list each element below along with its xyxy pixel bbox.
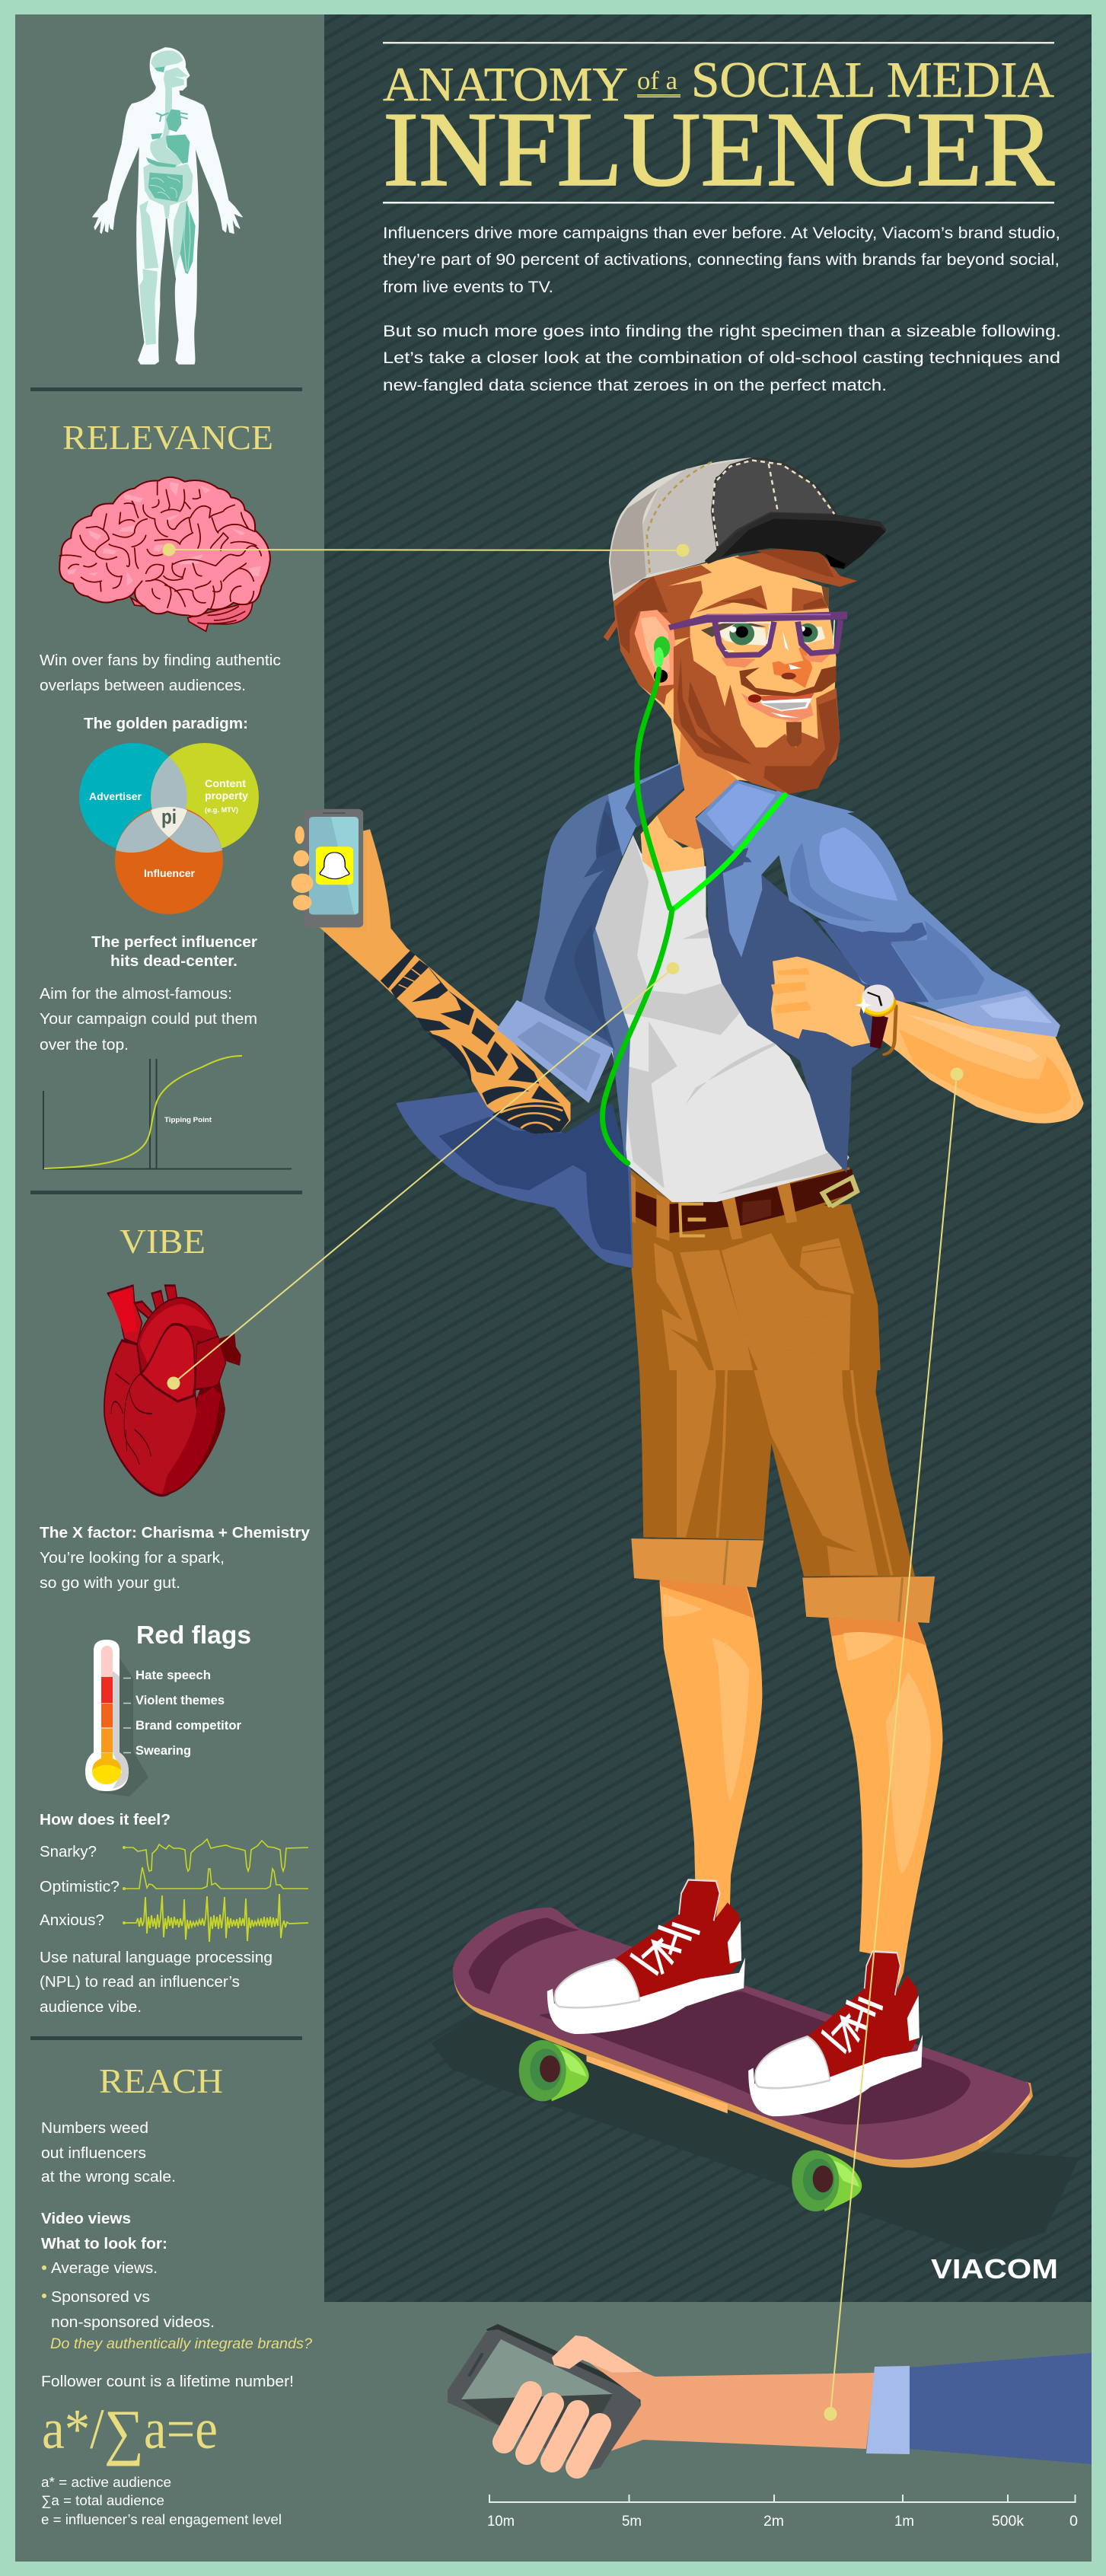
tattooed arm <box>305 829 571 1134</box>
text: win over fans <box>40 652 281 694</box>
divider: vibe top <box>30 1191 302 1194</box>
rear wheel <box>519 2040 589 2101</box>
callout line: heart to chest <box>167 962 679 1390</box>
icon: anatomy body figure <box>93 48 242 364</box>
divider: reach top <box>30 2036 302 2040</box>
heading: golden paradigm: The golden paradigm: <box>84 715 248 732</box>
mouth <box>741 693 814 722</box>
divider: relevance top <box>30 387 302 391</box>
text: video views checklist: Video views <box>41 2210 131 2227</box>
text: numbers weed: out influencers <box>41 2144 146 2162</box>
neck and chest <box>641 702 739 873</box>
left sneaker <box>547 1879 745 2034</box>
face <box>617 556 837 786</box>
text: almost-famous: Your campaign could put them <box>40 1010 257 1028</box>
collar right <box>696 779 855 875</box>
shorts upper <box>626 1204 881 1370</box>
title block: of a <box>637 67 677 95</box>
text: natural language processing: (NPL) to read an influencer’s <box>40 1973 240 1991</box>
eyes <box>701 620 825 646</box>
panel: striped dark main panel <box>324 14 1092 2302</box>
icon: heart <box>104 1286 241 1495</box>
text: video views checklist: What to look for: <box>41 2235 167 2252</box>
tattoo <box>381 951 569 1134</box>
intro text: Let’s take a closer look at the combination of old-school casting techniques and <box>383 349 1060 367</box>
text: numbers weed: at the wrong scale. <box>41 2168 176 2185</box>
waveform chart: sentiment <box>40 1839 308 1942</box>
cuff <box>866 2366 910 2454</box>
formula legend: ∑a = total audience <box>41 2493 164 2508</box>
collar left shoulder <box>642 764 680 782</box>
board shadow <box>432 2013 1079 2254</box>
phone <box>448 2324 641 2470</box>
heading: relevance: RELEVANCE <box>62 418 273 457</box>
formula: ∑ <box>104 2397 144 2466</box>
formula legend: e = influencer’s real engagement level <box>41 2512 282 2527</box>
reach scale: 2m <box>763 2514 784 2530</box>
icon: brain <box>59 477 270 631</box>
reach scale: 0 <box>1069 2514 1078 2530</box>
callout line: brain to cap <box>163 544 690 557</box>
text: how does it feel: How does it feel? <box>40 1811 171 1828</box>
waveform chart: sentiment: Optimistic? <box>40 1878 120 1895</box>
venn diagram: pi <box>161 805 177 828</box>
intro text: new-fangled data science that zeroes in on the perfect match. <box>383 377 887 394</box>
thermometer: Violent themes <box>135 1694 225 1707</box>
thermometer: Brand competitor <box>135 1719 242 1733</box>
text: almost-famous: Aim for the almost-famous: <box>40 985 232 1003</box>
forearm <box>610 2373 875 2451</box>
tipping point chart <box>43 1056 292 1169</box>
venn diagram: Influencer <box>144 867 196 879</box>
intro text: But so much more goes into finding the right specimen than a sizeable following. <box>383 323 1061 340</box>
heading: reach: REACH <box>99 2061 223 2100</box>
text: x factor <box>40 1524 311 1592</box>
front wheel <box>792 2150 862 2211</box>
title block: SOCIAL MEDIA <box>691 52 1054 108</box>
thermometer <box>85 1640 242 1797</box>
title block: INFLUENCER <box>383 91 1055 209</box>
earphone bright branch <box>674 795 785 909</box>
deck <box>453 1908 1033 2168</box>
reach scale <box>487 2495 1078 2530</box>
formula: a*/ <box>42 2398 112 2461</box>
right sneaker <box>748 1951 923 2116</box>
earphone cable upper <box>637 669 670 908</box>
skateboard <box>432 1908 1079 2254</box>
waveform chart: sentiment: Snarky? <box>40 1843 97 1860</box>
belt <box>621 1165 857 1243</box>
earphone cable lower <box>602 909 672 1163</box>
text: win over fans: overlaps between audiences. <box>40 677 246 694</box>
sleeve <box>776 790 1060 1036</box>
thermometer: Swearing <box>135 1744 191 1758</box>
formula legend <box>41 2475 282 2527</box>
text: numbers weed <box>41 2119 176 2185</box>
text: x factor: so go with your gut. <box>40 1574 180 1592</box>
hair <box>604 548 857 705</box>
hand fingers <box>504 2335 655 2467</box>
jacket right panel <box>696 796 878 1173</box>
formula: a=e <box>144 2398 218 2461</box>
right leg <box>828 1618 942 1991</box>
torso upper layers <box>292 809 881 1370</box>
title block <box>383 42 1055 209</box>
intro text: from live events to TV. <box>383 279 553 296</box>
thermometer: Hate speech <box>135 1669 211 1682</box>
text: video views checklist: non-sponsored videos. <box>51 2313 215 2331</box>
text: natural language processing: audience vibe. <box>40 1998 142 2016</box>
intro text: Influencers drive more campaigns than ever before. At Velocity, Viacom’s brand studio, <box>383 225 1060 242</box>
text: video views checklist: Sponsored vs <box>51 2288 150 2306</box>
text: follower count: Follower count is a lifetime number! <box>41 2373 294 2390</box>
venn diagram: property <box>205 789 248 802</box>
reach scale: 500k <box>992 2514 1025 2530</box>
text: video views checklist: Do they authentically integrate brands? <box>50 2335 312 2352</box>
text: video views checklist: Average views. <box>51 2259 158 2277</box>
text: natural language processing <box>40 1949 273 2016</box>
venn diagram: Advertiser <box>89 790 142 802</box>
eyebrows <box>696 585 828 613</box>
text: perfect influencer: The perfect influencer <box>91 933 257 951</box>
text: perfect influencer <box>91 933 257 970</box>
cap <box>609 457 887 601</box>
callout line: forearm to bottom arm <box>824 1067 964 2421</box>
venn diagram: Content <box>205 777 246 789</box>
left cuff <box>631 1538 763 1587</box>
nose and cheek shading <box>721 626 833 688</box>
heading: red flags: Red flags <box>136 1621 251 1649</box>
beard <box>674 637 840 794</box>
hand <box>771 957 870 1047</box>
text: almost-famous <box>40 985 257 1054</box>
text: video views checklist <box>41 2210 312 2352</box>
shorts lower <box>631 1349 935 1623</box>
reach scale: 5m <box>622 2514 642 2530</box>
t-shirt <box>586 835 849 1202</box>
reach scale: 1m <box>894 2514 914 2530</box>
text: win over fans: Win over fans by finding authentic <box>40 652 281 669</box>
intro text <box>383 225 1061 394</box>
heading: vibe: VIBE <box>120 1222 206 1261</box>
text: natural language processing: Use natural language processing <box>40 1949 273 1966</box>
waveform chart: sentiment: Anxious? <box>40 1911 104 1929</box>
legs <box>659 1580 942 1991</box>
formula legend: a* = active audience <box>41 2475 171 2490</box>
right forearm <box>872 1000 1084 1124</box>
jacket placket <box>722 862 762 958</box>
text: perfect influencer: hits dead-center. <box>110 952 237 970</box>
venn diagram <box>79 743 259 914</box>
text: almost-famous: over the top. <box>40 1036 129 1054</box>
left leg <box>659 1580 762 1921</box>
bottom arm holding phone <box>448 2324 1092 2470</box>
phone with snapchat <box>292 809 370 932</box>
wristwatch <box>855 984 896 1054</box>
reach scale: 10m <box>487 2514 515 2530</box>
right cuff <box>802 1577 935 1623</box>
text: x factor: The X factor: Charisma + Chemistry <box>40 1524 311 1541</box>
venn diagram: (e.g. MTV) <box>205 806 238 814</box>
sleeve <box>910 2353 1092 2464</box>
intro text: they’re part of 90 percent of activations, connecting fans with brands far beyond social, <box>383 251 1060 269</box>
left sleeve cuff <box>496 1000 614 1103</box>
glasses <box>668 611 847 655</box>
text: x factor: You’re looking for a spark, <box>40 1549 225 1567</box>
sneakers <box>547 1879 923 2116</box>
logo: viacom: VIACOM <box>931 2253 1058 2284</box>
head <box>604 457 887 909</box>
mustache <box>739 666 837 697</box>
text: numbers weed: Numbers weed <box>41 2119 148 2137</box>
ear <box>635 610 677 687</box>
jacket back tail <box>396 1092 633 1268</box>
sleeve cuff right <box>935 990 1060 1037</box>
earbud <box>654 636 670 668</box>
tipping point chart: Tipping Point <box>164 1116 212 1124</box>
jacket left panel <box>503 764 684 1165</box>
title block: ANATOMY <box>383 57 628 111</box>
jacket and right arm <box>496 764 1084 1173</box>
